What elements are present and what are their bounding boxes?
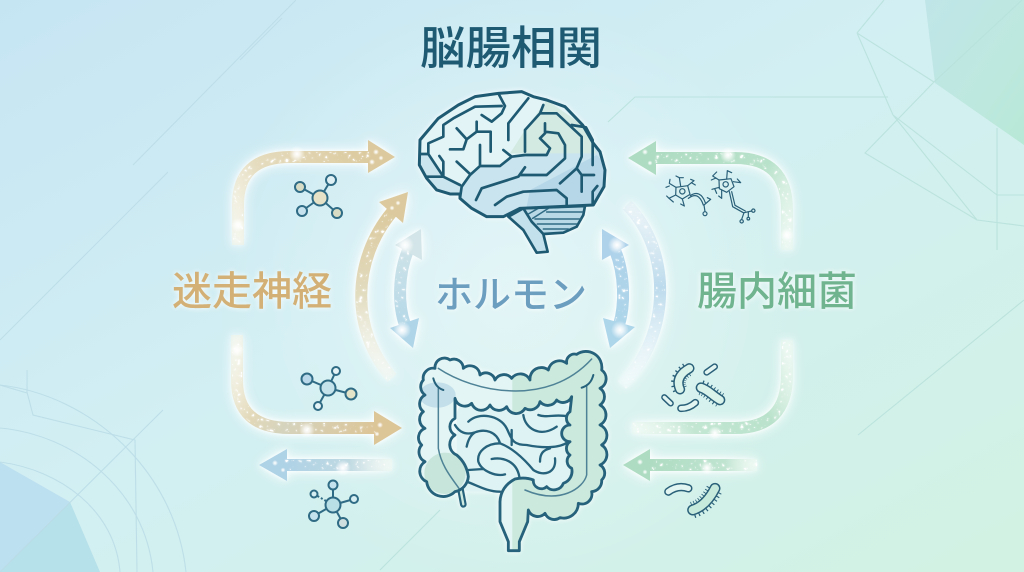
label: vagus nerve: 迷走神経 bbox=[172, 270, 332, 314]
arrow: small double arrow left bbox=[390, 229, 422, 348]
icon: brain bbox=[419, 92, 608, 253]
arrow: large blue arc bbox=[622, 205, 660, 385]
small intestine bbox=[455, 402, 572, 492]
title: 脳腸相関 bbox=[420, 23, 602, 74]
icon: molecule bottom bbox=[309, 480, 358, 528]
label: gut microbiota: 腸内細菌 bbox=[697, 270, 857, 314]
arrow: vagus upper to brain bbox=[238, 140, 395, 245]
icon: neurons bbox=[666, 171, 755, 223]
icon: intestines bbox=[419, 345, 612, 555]
large intestine bbox=[419, 351, 607, 551]
arrow: microbiota upper to brain bbox=[628, 141, 787, 250]
glints on arrows bbox=[230, 146, 794, 476]
icon: bacteria group upper bbox=[664, 367, 720, 408]
cerebellum bbox=[523, 206, 585, 234]
arrow: blue from gut leftwards bbox=[259, 449, 392, 481]
arrow: vagus lower to gut bbox=[237, 335, 402, 445]
appendix bbox=[460, 487, 463, 504]
label: hormones: ホルモン bbox=[435, 275, 587, 317]
arrow: green to gut bbox=[623, 449, 757, 481]
brain stem bbox=[508, 208, 548, 253]
arrow: microbiota lower from gut bbox=[632, 340, 787, 428]
icon: molecule lower left bbox=[302, 367, 356, 410]
icon: molecule upper left bbox=[295, 175, 342, 218]
arrow: small double arrow right bbox=[602, 229, 635, 348]
arrow: large tan arc to brain bbox=[361, 192, 408, 378]
sparkles on arrows bbox=[237, 157, 787, 465]
icon: bacteria group lower bbox=[668, 487, 715, 510]
